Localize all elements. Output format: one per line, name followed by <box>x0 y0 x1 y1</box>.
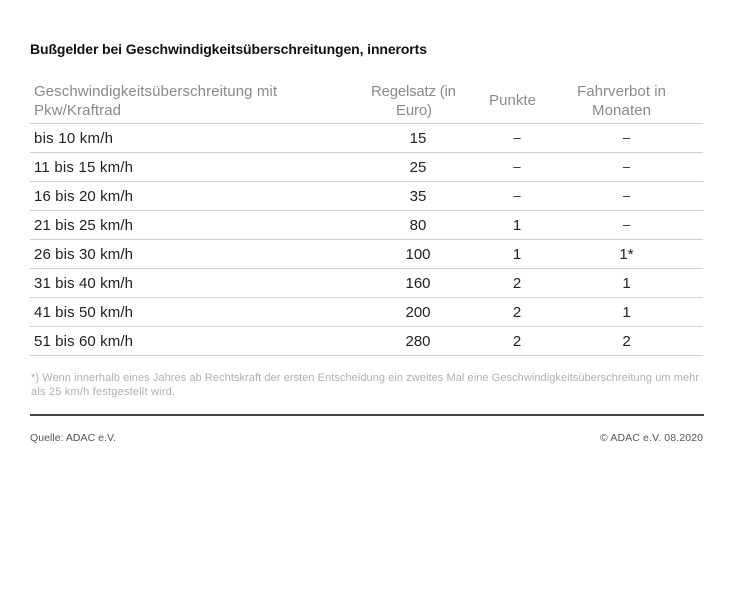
row: 41 bis 50 km/h <box>34 304 631 321</box>
table <box>30 83 703 356</box>
header: fine column: Euro) <box>396 102 432 119</box>
row: 51 bis 60 km/h: 51 bis 60 km/h <box>34 333 133 350</box>
row: 11 bis 15 km/h: 25 <box>410 159 426 176</box>
header: driving ban column: Monaten <box>592 102 651 119</box>
row: 11 bis 15 km/h: – <box>623 159 631 174</box>
row: 51 bis 60 km/h: 2 <box>622 333 631 350</box>
row: 41 bis 50 km/h: 41 bis 50 km/h <box>34 304 133 321</box>
row: bis 10 km/h <box>34 130 631 147</box>
row: 21 bis 25 km/h <box>34 217 631 234</box>
table header <box>34 83 666 119</box>
row: 21 bis 25 km/h: 80 <box>410 217 426 234</box>
row: bis 10 km/h: bis 10 km/h <box>34 130 113 147</box>
row: bis 10 km/h: 15 <box>410 130 426 147</box>
row: 31 bis 40 km/h <box>34 275 631 292</box>
source: Quelle: ADAC e.V. <box>30 432 116 444</box>
row: 11 bis 15 km/h <box>34 159 631 176</box>
row: 16 bis 20 km/h: – <box>623 188 631 203</box>
header: speeding column: Geschwindigkeitsüberschreitung mit <box>34 83 278 100</box>
row: 16 bis 20 km/h: 35 <box>410 188 426 205</box>
row: 16 bis 20 km/h: – <box>513 188 521 203</box>
row: 31 bis 40 km/h: 2 <box>513 275 521 292</box>
row: 16 bis 20 km/h: 16 bis 20 km/h <box>34 188 133 205</box>
title: Bußgelder bei Geschwindigkeitsüberschreitungen, innerorts <box>30 41 427 57</box>
row: 11 bis 15 km/h: 11 bis 15 km/h <box>34 159 133 176</box>
row: 41 bis 50 km/h: 1 <box>622 304 631 321</box>
row: bis 10 km/h: – <box>513 130 521 145</box>
row: 26 bis 30 km/h: 100 <box>405 246 431 263</box>
copyright: © ADAC e.V. 08.2020 <box>600 432 703 444</box>
row: 26 bis 30 km/h: 26 bis 30 km/h <box>34 246 133 263</box>
row: 31 bis 40 km/h: 1 <box>622 275 631 292</box>
row: 31 bis 40 km/h: 31 bis 40 km/h <box>34 275 133 292</box>
header: driving ban column: Fahrverbot in <box>577 83 666 100</box>
row: 21 bis 25 km/h: 21 bis 25 km/h <box>34 217 133 234</box>
row: 26 bis 30 km/h: 1 <box>513 246 521 263</box>
header: points column: Punkte <box>489 92 536 109</box>
row: 26 bis 30 km/h: 1* <box>619 246 634 263</box>
row: 41 bis 50 km/h: 200 <box>405 304 431 321</box>
row: 16 bis 20 km/h <box>34 188 631 205</box>
row: bis 10 km/h: – <box>623 130 631 145</box>
header: fine column: Regelsatz (in <box>371 83 456 100</box>
row: 21 bis 25 km/h: – <box>623 217 631 232</box>
row: 51 bis 60 km/h: 280 <box>405 333 431 350</box>
row: 51 bis 60 km/h: 2 <box>513 333 521 350</box>
footnote: als 25 km/h festgestellt wird. <box>31 386 175 398</box>
row: 26 bis 30 km/h <box>34 246 634 263</box>
row: 31 bis 40 km/h: 160 <box>405 275 431 292</box>
footnote: *) Wenn innerhalb eines Jahres ab Rechtskraft der ersten Entscheidung ein zweites Mal eine Geschwindigkeitsüberschreitung um mehr <box>31 372 699 384</box>
row: 11 bis 15 km/h: – <box>513 159 521 174</box>
row: 51 bis 60 km/h <box>34 333 631 350</box>
row: 21 bis 25 km/h: 1 <box>513 217 521 234</box>
header: speeding column: Pkw/Kraftrad <box>34 102 121 119</box>
row: 41 bis 50 km/h: 2 <box>513 304 521 321</box>
